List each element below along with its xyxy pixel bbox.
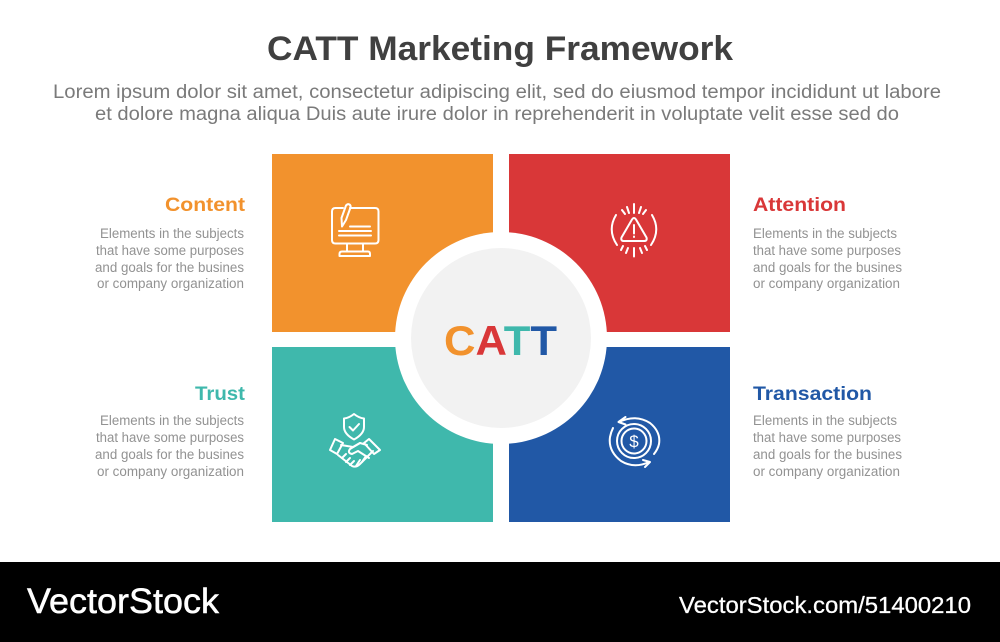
footer band xyxy=(0,562,1000,642)
panel: content block xyxy=(272,154,493,332)
icon: warning alert xyxy=(612,204,656,256)
label: attention: Attention xyxy=(753,194,846,216)
panel: trust block xyxy=(272,347,493,522)
subtitle text xyxy=(53,82,941,125)
center white ring xyxy=(395,232,607,444)
label: transaction: that have some purposes xyxy=(753,430,901,445)
label: content: or company organization xyxy=(97,276,244,291)
subtitle text: et dolore magna aliqua Duis aute irure dolor in reprehenderit in voluptate velit esse sed do xyxy=(95,104,899,125)
label: trust: or company organization xyxy=(97,464,244,479)
label: transaction xyxy=(753,383,902,479)
label: attention: Elements in the subjects xyxy=(753,226,897,241)
icon: dollar coin with arrows: $ xyxy=(629,432,639,451)
label: attention xyxy=(753,194,902,291)
label: transaction: or company organization xyxy=(753,464,900,479)
label: content: Content xyxy=(165,194,246,216)
footer image id: VectorStock.com/51400210 xyxy=(679,592,971,618)
title: CATT Marketing Framework xyxy=(267,30,733,68)
label: attention: or company organization xyxy=(753,276,900,291)
subtitle text: Lorem ipsum dolor sit amet, consectetur adipiscing elit, sed do eiusmod tempor incididunt ut labore xyxy=(53,82,941,103)
label: attention: that have some purposes xyxy=(753,243,901,258)
panel: transaction block xyxy=(509,347,730,522)
icon: computer with pen xyxy=(332,204,378,256)
label: transaction: Elements in the subjects xyxy=(753,413,897,428)
panel: attention block xyxy=(509,154,730,332)
label: content: and goals for the busines xyxy=(95,260,244,275)
label: trust xyxy=(95,383,246,479)
label: transaction: Transaction xyxy=(753,383,872,405)
icon: handshake with shield xyxy=(330,414,380,467)
label: trust: and goals for the busines xyxy=(95,447,244,462)
label: attention: and goals for the busines xyxy=(753,260,902,275)
center label CATT: CATT xyxy=(444,317,557,364)
label: trust: Elements in the subjects xyxy=(100,413,244,428)
label: content: that have some purposes xyxy=(96,243,244,258)
footer logo text: VectorStock xyxy=(27,582,220,621)
center grey circle xyxy=(411,248,591,428)
label: content xyxy=(95,194,246,291)
label: content: Elements in the subjects xyxy=(100,226,244,241)
label: transaction: and goals for the busines xyxy=(753,447,902,462)
label: trust: Trust xyxy=(195,383,246,405)
icon: dollar coin with arrows xyxy=(610,417,659,467)
label: trust: that have some purposes xyxy=(96,430,244,445)
